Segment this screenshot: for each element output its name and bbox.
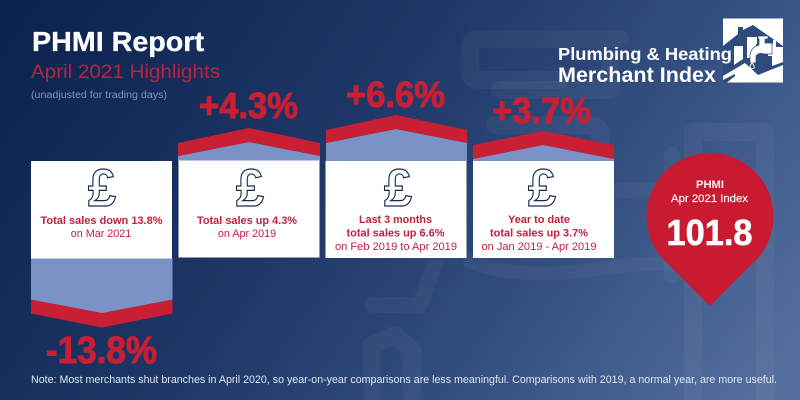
icon: pound: £: [384, 159, 412, 218]
big figure: -13.8%: -13.8%: [46, 330, 157, 372]
big figure: +3.7%: +3.7%: [492, 90, 591, 131]
panel: year to date: [473, 131, 614, 258]
card: [178, 160, 320, 258]
up arrow: [326, 115, 467, 161]
card text: [40, 215, 163, 240]
index pin: [647, 153, 774, 306]
pin label: Apr 2021 Index: [671, 193, 749, 205]
card text: Total sales up 4.3%: [197, 215, 297, 227]
title: PHMI Report: [32, 26, 204, 57]
card text: [482, 214, 596, 253]
big figure: +6.6%: +6.6%: [346, 74, 445, 115]
card text: on Jan 2019 - Apr 2019: [482, 241, 596, 253]
card text: [197, 215, 297, 240]
trading days note: (unadjusted for trading days): [31, 90, 167, 101]
icon: pound: £: [236, 159, 264, 218]
big figure: +4.3%: +4.3%: [199, 85, 298, 126]
card: [31, 161, 172, 258]
footnote: Note: Most merchants shut branches in April 2020, so year-on-year comparisons are less meaningful. Comparisons with 2019, a normal year, are more useful.: [31, 374, 777, 386]
panel: total sales up 4.3%: [178, 128, 320, 258]
card text: on Mar 2021: [71, 228, 131, 240]
pin label: [671, 179, 749, 205]
card text: on Apr 2019: [218, 228, 276, 240]
logo wordmark: Plumbing & Heating: [558, 44, 732, 64]
subtitle: April 2021 Highlights: [31, 61, 220, 83]
up arrow: [178, 128, 320, 161]
icon: pound: £: [88, 159, 116, 218]
logo icon: house and tap: [723, 18, 783, 82]
down arrow: [31, 258, 172, 328]
card: [473, 161, 614, 258]
pin shape: [647, 153, 774, 306]
card text: on Feb 2019 to Apr 2019: [335, 241, 457, 253]
icon: pound: £: [528, 159, 556, 218]
card text: total sales up 6.6%: [346, 228, 445, 240]
panel: total sales down 13.8%: [31, 159, 172, 328]
card text: Total sales down 13.8%: [40, 215, 163, 227]
pin value: 101.8: [666, 212, 752, 253]
card text: Last 3 months: [359, 214, 432, 226]
card text: total sales up 3.7%: [490, 228, 588, 240]
logo wordmark: Merchant Index: [558, 64, 716, 87]
card text: [335, 214, 457, 253]
card: [326, 161, 466, 258]
logo wordmark: [558, 44, 732, 87]
logo: [558, 18, 783, 87]
up arrow: [473, 131, 614, 161]
card text: Year to date: [508, 214, 570, 226]
pin label: PHMI: [696, 179, 724, 191]
panel: last 3 months: [326, 115, 467, 258]
